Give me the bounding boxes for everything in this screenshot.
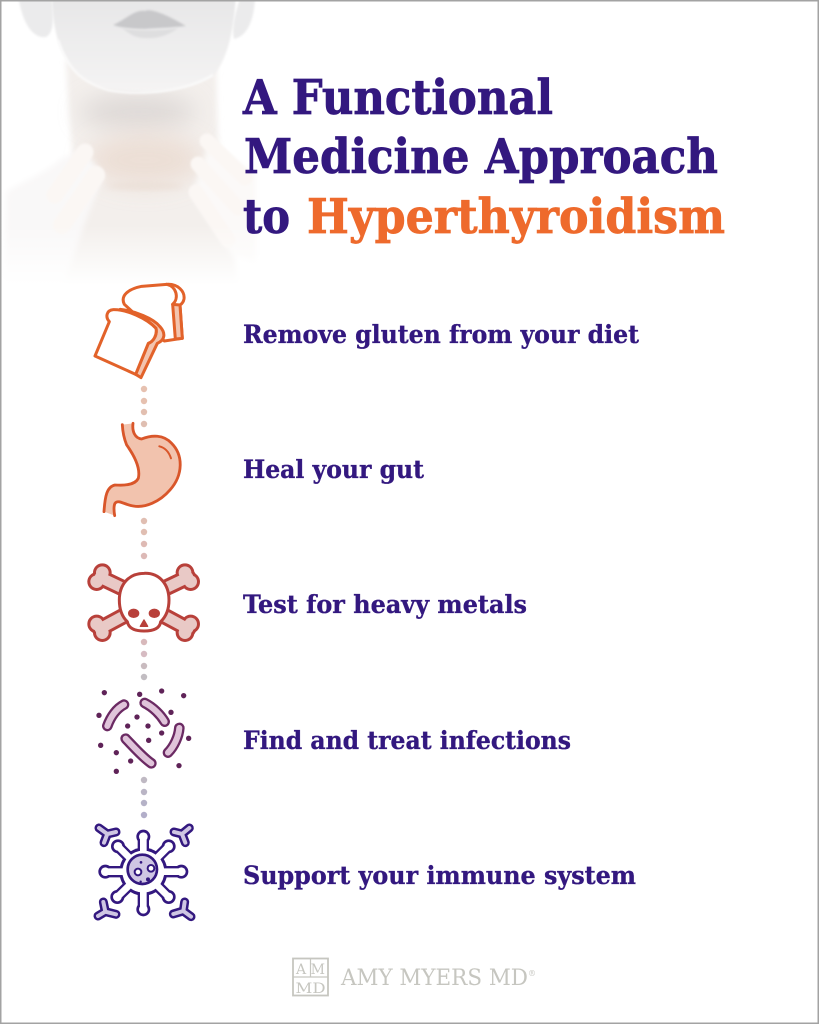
logo: Amy Myers MD (293, 958, 536, 997)
step label: immune system: Support your immune system (243, 861, 636, 890)
step label: infections: Find and treat infections (243, 726, 571, 755)
connector dots: stomach to skull (141, 518, 147, 559)
logo: Amy Myers MD: ® (528, 969, 536, 978)
icon: immune virus (98, 828, 191, 917)
step label: heal gut: Heal your gut (243, 455, 424, 484)
logo: Amy Myers MD: AMY MYERS MD (340, 966, 528, 991)
title: A Functional (242, 70, 553, 126)
connector dots: bread to stomach (141, 386, 147, 427)
icon: skull and crossbones (87, 563, 200, 642)
title: Hyperthyroidism (307, 189, 725, 245)
title: Medicine Approach (244, 129, 718, 185)
step label: heavy metals: Test for heavy metals (243, 590, 527, 619)
icon: bread slices (95, 284, 184, 378)
connector dots: bacteria to virus (141, 777, 147, 818)
connector dots: skull to bacteria (141, 639, 147, 680)
icon: bacteria (96, 688, 191, 774)
logo: Amy Myers MD: A M (295, 962, 325, 978)
photo: woman touching her neck (0, 0, 262, 308)
title (242, 70, 725, 245)
logo: Amy Myers MD: MD (296, 981, 326, 997)
step label: remove gluten: Remove gluten from your diet (243, 320, 639, 349)
icon: stomach (104, 423, 180, 516)
title: to (243, 189, 290, 245)
